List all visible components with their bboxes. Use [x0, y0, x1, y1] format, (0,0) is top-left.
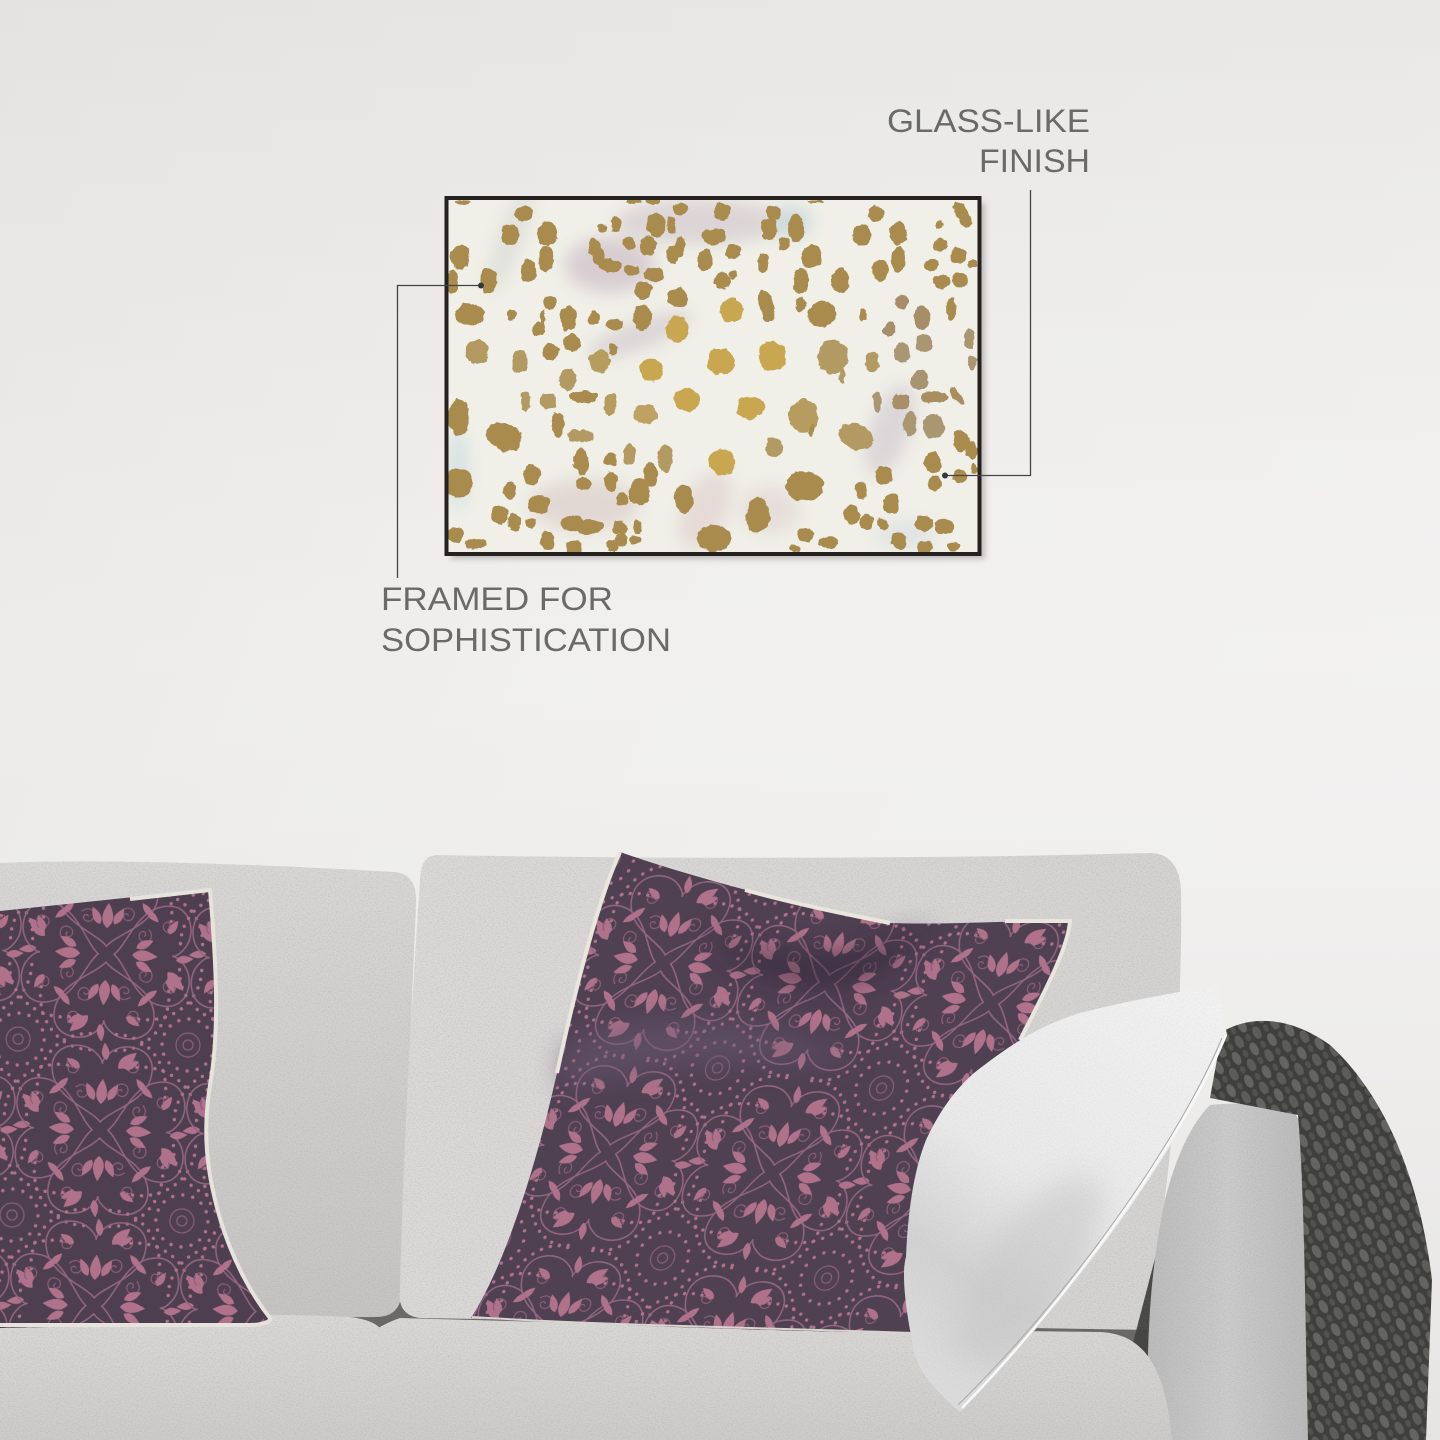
leader line: [945, 190, 1030, 476]
centre purple pillow: [471, 852, 1070, 1333]
pillow piping: [557, 852, 1070, 1073]
callout text: GLASS-LIKE: [887, 103, 1090, 139]
middle back cushion: [400, 853, 1181, 1330]
callout text: FRAMED FOR: [381, 581, 613, 617]
right sofa arm: [1148, 1104, 1308, 1440]
blanket strip behind arm: [1128, 1170, 1200, 1378]
painting frame: [446, 198, 980, 554]
pillow fold shading: [560, 925, 930, 1090]
knitted throw blanket: [1210, 1021, 1432, 1440]
painting shadow: [451, 203, 985, 559]
linen texture: [0, 853, 1310, 1440]
pillow shading: [920, 988, 1222, 1389]
sofa: [0, 853, 1310, 1440]
callout text: FINISH: [979, 143, 1090, 179]
callout: glass-like finish: [887, 103, 1090, 478]
sofa dark gap: [0, 1290, 1180, 1440]
callout text: [887, 103, 1090, 179]
white pillow: [900, 980, 1230, 1415]
left purple pillow: [0, 889, 272, 1328]
gold spots: [445, 198, 978, 554]
callout text: SOPHISTICATION: [381, 622, 671, 658]
callout: framed for sophistication: [381, 282, 671, 658]
pillow piping: [0, 890, 270, 1325]
leader line: [398, 286, 481, 578]
pillow piping: [962, 1035, 1226, 1408]
middle seat cushion: [288, 1318, 1172, 1440]
framed painting with gold leaf spots: [445, 184, 985, 559]
painting canvas: [445, 184, 981, 557]
left back cushion: [0, 861, 416, 1320]
left seat cushion: [0, 1315, 382, 1440]
callout text: [381, 581, 671, 658]
